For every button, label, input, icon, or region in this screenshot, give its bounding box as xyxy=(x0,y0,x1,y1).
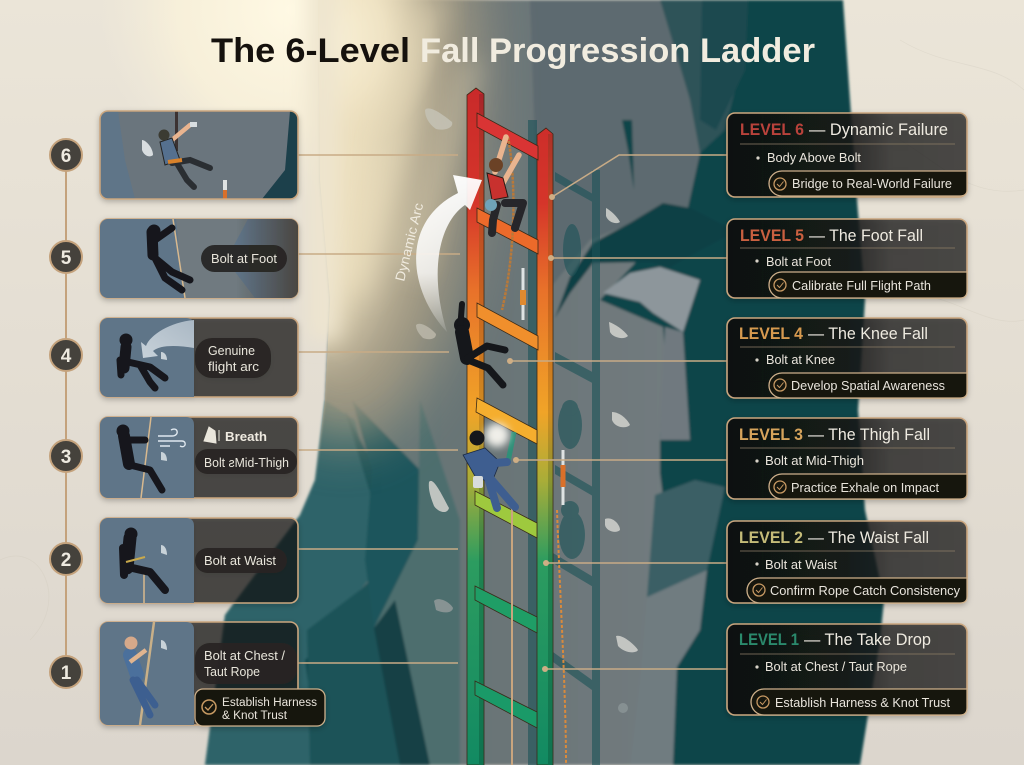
pill: bolt mid-thigh xyxy=(195,449,297,474)
heading xyxy=(739,426,930,444)
outcome pill: Confirm Rope Catch Consistency xyxy=(770,584,961,598)
breath label xyxy=(204,427,267,444)
number 6: 6 xyxy=(61,146,71,167)
number 1 xyxy=(50,656,82,688)
bullet: Body Above Bolt xyxy=(767,151,862,165)
climber: level 6 red shirt xyxy=(485,137,523,233)
rock wall illustration xyxy=(205,0,884,765)
bullet: Bolt at Mid-Thigh xyxy=(765,454,864,468)
badge: establish harness: & Knot Trust xyxy=(222,710,288,722)
number 3 xyxy=(50,440,82,472)
heading: LEVEL 2 xyxy=(739,529,803,547)
title: The 6-Level xyxy=(211,32,410,70)
number 1: 1 xyxy=(61,663,72,684)
rungs xyxy=(475,113,538,728)
bullet: Bolt at Chest / Taut Rope xyxy=(765,660,907,674)
number 2 xyxy=(50,543,82,575)
left panel: level 3 xyxy=(100,417,298,498)
outcome pill xyxy=(769,474,967,499)
outcome pill xyxy=(751,689,967,715)
number 4: 4 xyxy=(61,346,72,367)
number 6 xyxy=(50,139,82,171)
outcome pill xyxy=(769,272,967,298)
number 4 xyxy=(50,339,82,371)
heading: — The Waist Fall xyxy=(808,529,929,547)
pill: bolt at waist: Bolt at Waist xyxy=(204,554,277,568)
heading: LEVEL 4 xyxy=(739,325,804,343)
pill: bolt mid-thigh: Bolt ƨMid-Thigh xyxy=(204,456,289,470)
climber: level 4 silhouette xyxy=(454,304,505,385)
rock holds xyxy=(416,108,638,713)
pill: bolt at waist xyxy=(195,548,287,573)
bullet: Bolt at Waist xyxy=(765,558,838,572)
ladder xyxy=(467,88,553,765)
heading: — The Thigh Fall xyxy=(808,426,930,444)
pill: genuine flight arc: Genuine xyxy=(208,344,255,358)
number 3: 3 xyxy=(61,447,71,468)
heading: LEVEL 6 xyxy=(740,121,804,139)
heading xyxy=(739,529,929,547)
left connector lines xyxy=(298,155,460,663)
pill: bolt at chest: Bolt at Chest / xyxy=(204,649,286,663)
pill: bolt at chest xyxy=(195,643,297,684)
badge: establish harness xyxy=(195,689,325,726)
level number timeline xyxy=(50,139,82,688)
breath label: Breath xyxy=(225,429,267,444)
heading: LEVEL 1 xyxy=(739,631,799,649)
soft seam between paper and lit rock xyxy=(308,0,338,340)
heading xyxy=(739,631,931,649)
pill: bolt at chest: Taut Rope xyxy=(204,665,260,679)
outcome pill xyxy=(769,171,967,196)
heading: — The Take Drop xyxy=(804,631,931,649)
heading: — The Foot Fall xyxy=(809,227,923,245)
title: Fall Progression Ladder xyxy=(420,32,815,70)
right panel: level 6 xyxy=(727,113,967,197)
label: dynamic arc: Dynamic Arc xyxy=(392,201,426,283)
left panel: level 4 xyxy=(100,318,298,397)
number 5: 5 xyxy=(61,248,72,269)
pill: genuine flight arc xyxy=(195,338,271,378)
pill: genuine flight arc: flight arc xyxy=(208,360,259,374)
bullet: Bolt at Knee xyxy=(766,353,835,367)
badge: establish harness: Establish Harness xyxy=(222,697,317,709)
left panel: level 1 xyxy=(100,622,325,726)
heading: LEVEL 3 xyxy=(739,426,803,444)
dynamic arc arrow xyxy=(392,175,482,332)
right panel: level 1 xyxy=(727,624,967,715)
outcome pill: Calibrate Full Flight Path xyxy=(792,279,931,293)
number 2: 2 xyxy=(61,550,71,571)
outcome pill: Bridge to Real-World Failure xyxy=(792,177,952,191)
pill: bolt at foot xyxy=(201,245,287,272)
left panel: level 5 xyxy=(100,219,298,298)
outcome pill xyxy=(747,578,967,603)
heading: — Dynamic Failure xyxy=(809,121,948,139)
outcome pill: Practice Exhale on Impact xyxy=(791,481,940,495)
left panel: level 2 xyxy=(100,518,298,603)
ropes and quickdraws xyxy=(502,137,566,765)
left panel: level 6 xyxy=(100,111,298,199)
outcome pill: Develop Spatial Awareness xyxy=(791,379,945,393)
rail: right xyxy=(537,128,553,765)
heading xyxy=(739,325,928,343)
outcome pill: Establish Harness & Knot Trust xyxy=(775,696,951,710)
number 5 xyxy=(50,241,82,273)
heading: LEVEL 5 xyxy=(740,227,804,245)
outcome pill xyxy=(769,373,967,398)
heading xyxy=(740,227,923,245)
right panel: level 4 xyxy=(727,318,967,398)
right panel: level 5 xyxy=(727,219,967,298)
climber: level 3 blue xyxy=(463,423,515,508)
pill: bolt at foot: Bolt at Foot xyxy=(211,252,278,266)
title xyxy=(211,32,815,70)
bullet: Bolt at Foot xyxy=(766,255,832,269)
heading: — The Knee Fall xyxy=(808,325,928,343)
right panel: level 2 xyxy=(727,521,967,603)
ladder shadow xyxy=(528,120,600,765)
right connector lines xyxy=(507,155,727,672)
heading xyxy=(740,121,948,139)
right panel: level 3 xyxy=(727,418,967,499)
rail: left xyxy=(467,88,484,765)
sunlight on rock xyxy=(318,0,507,472)
